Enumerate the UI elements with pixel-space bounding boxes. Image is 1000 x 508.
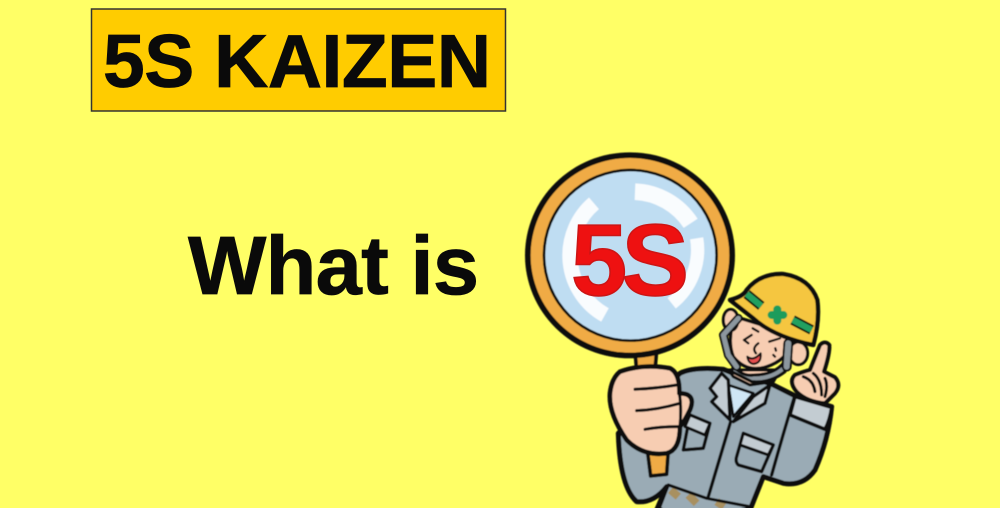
- sleeve cuff: [790, 397, 832, 429]
- helmet cross: [772, 309, 783, 321]
- shirt: [728, 385, 753, 417]
- collar: [710, 373, 730, 420]
- belt: [662, 488, 750, 508]
- helmet stripes: [747, 294, 761, 306]
- front seam: [708, 422, 731, 497]
- helmet straps: [723, 318, 738, 367]
- illustration: worker holding magnifying glass: [525, 152, 838, 508]
- helmet: [730, 274, 818, 345]
- sleeve seam: [772, 398, 794, 475]
- pointing hand: [792, 342, 838, 403]
- fist: [610, 366, 692, 454]
- magnifying glass lens: [525, 152, 735, 358]
- ears: [723, 309, 738, 331]
- heading: What is: What is: [188, 219, 479, 312]
- pocket left: [683, 415, 710, 450]
- lens glare: [570, 203, 605, 315]
- face: [744, 328, 780, 357]
- title: 5S KAIZEN: [103, 19, 491, 103]
- magnifying glass handle: [635, 350, 668, 476]
- lens label: 5S: 5S: [571, 205, 689, 317]
- worker body: [618, 369, 832, 508]
- worker head: [723, 274, 818, 385]
- pocket right: [736, 433, 773, 472]
